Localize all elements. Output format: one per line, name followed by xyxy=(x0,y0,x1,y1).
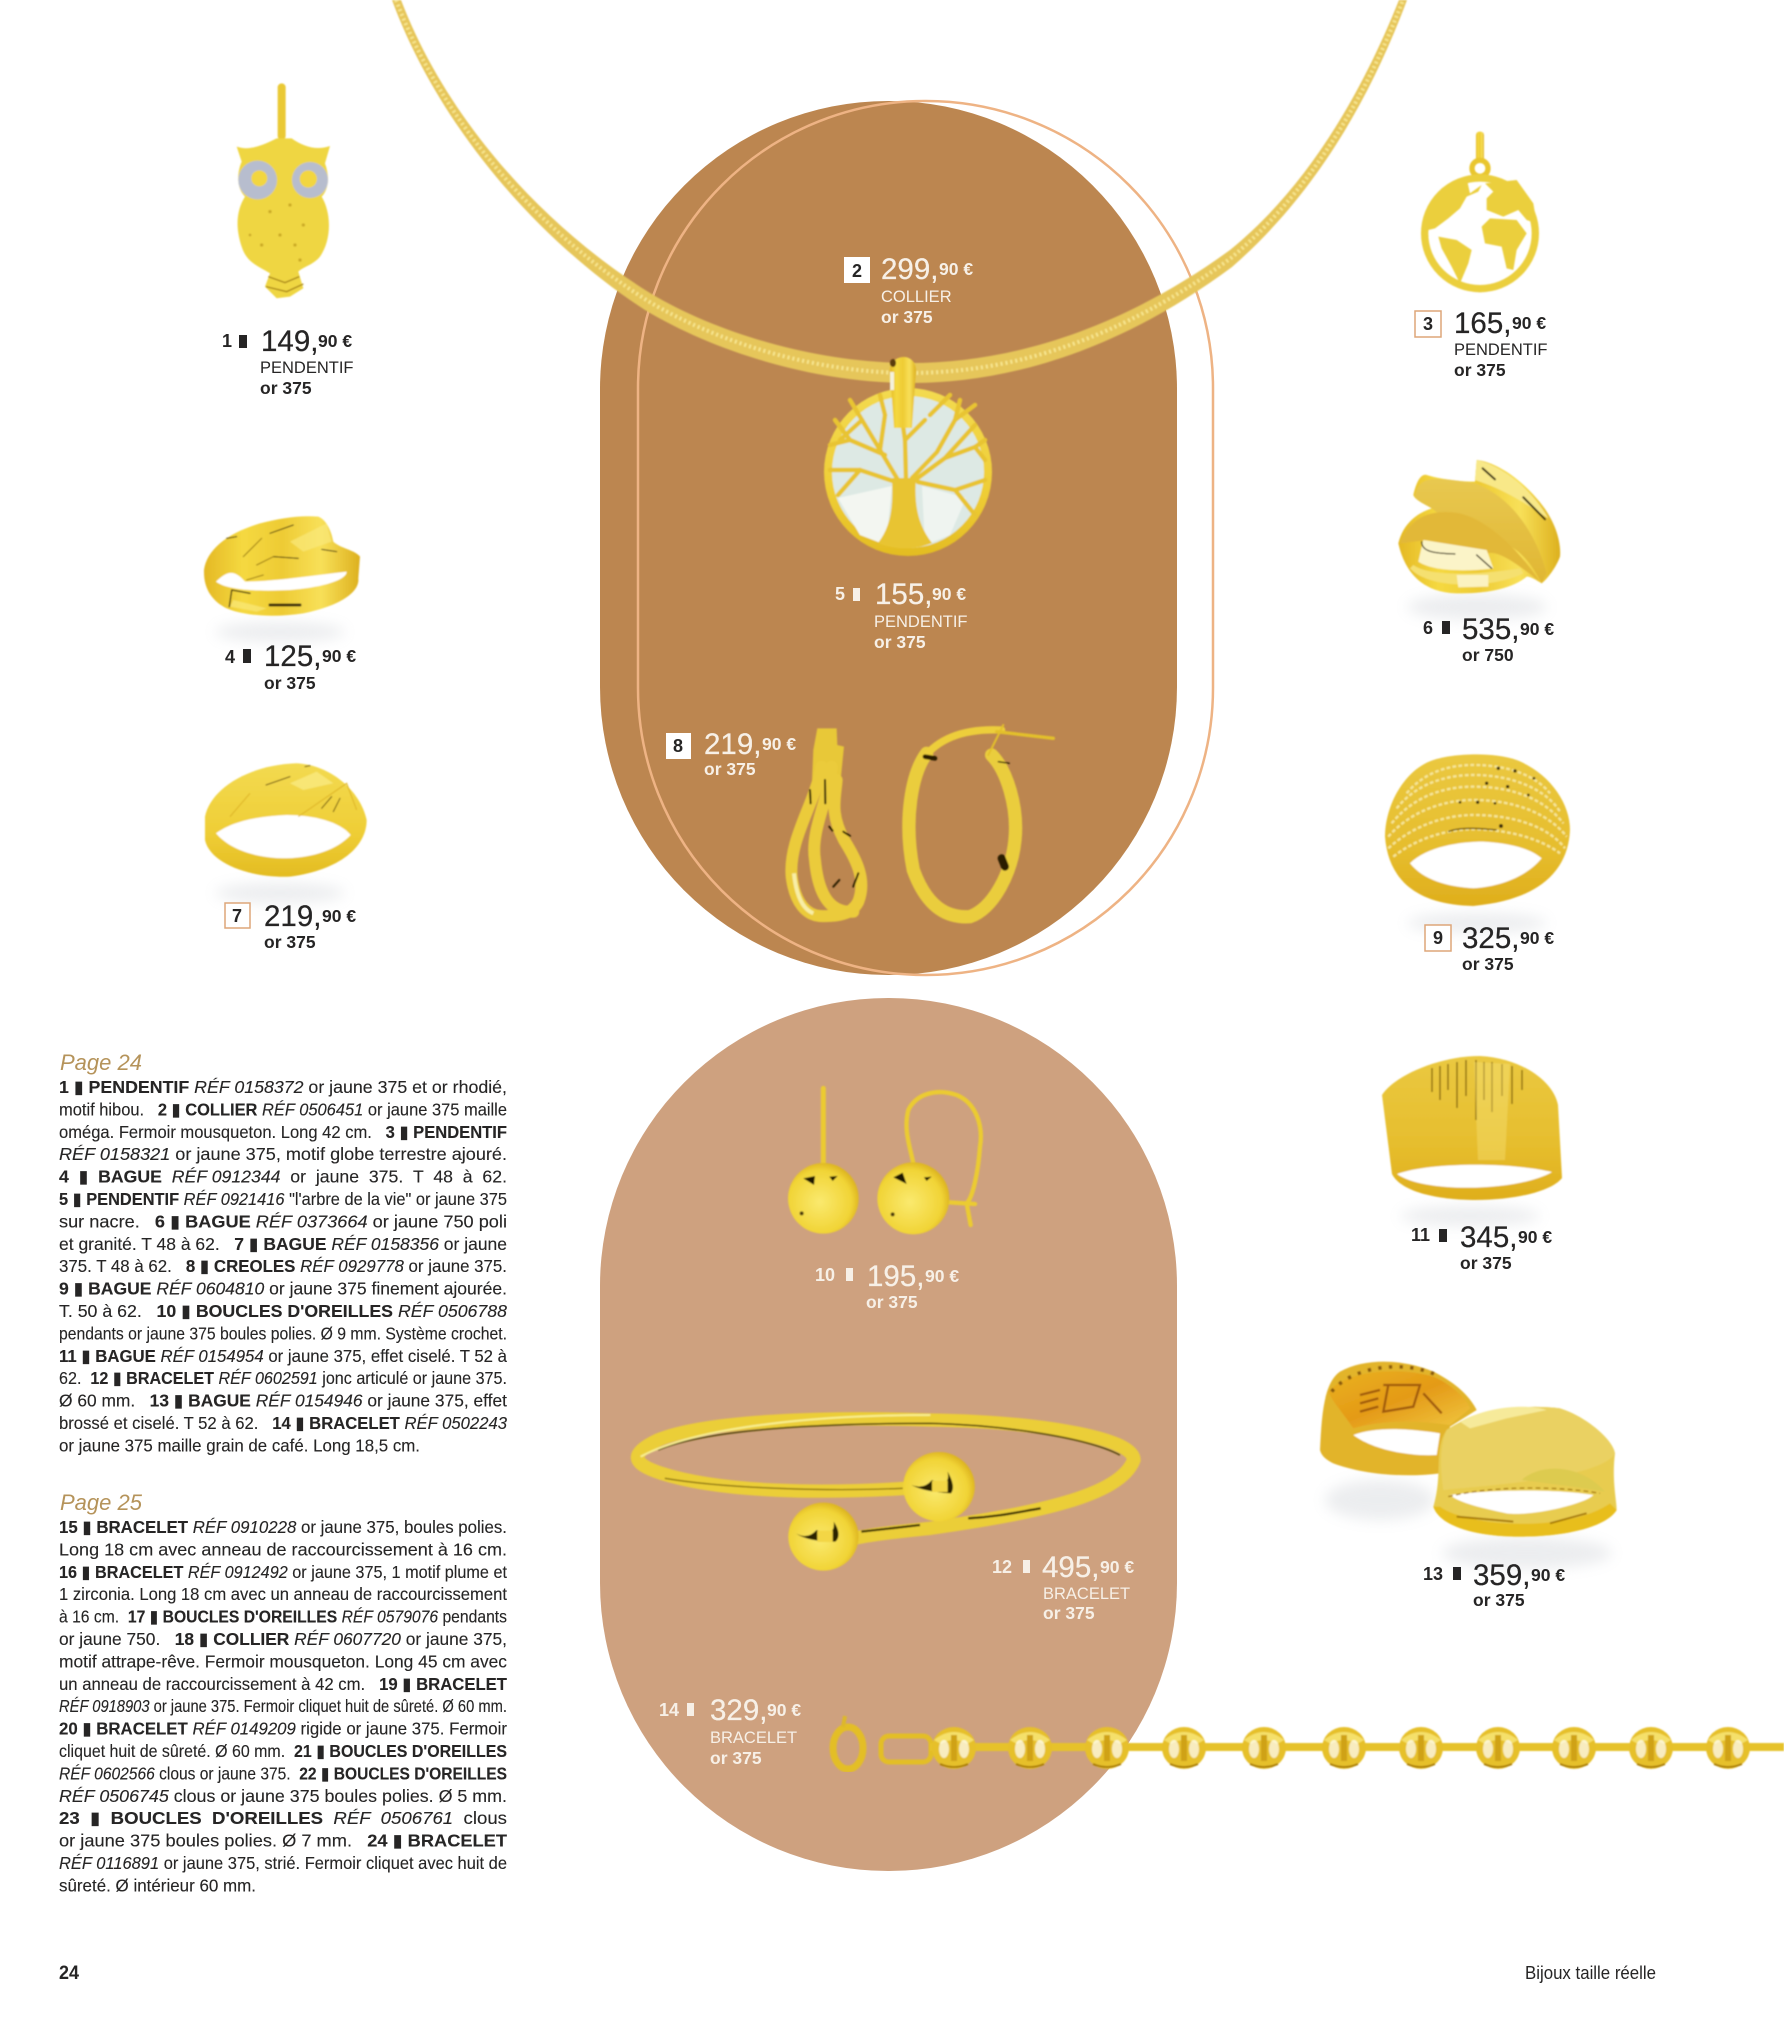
text block: page 25 descriptions: or jaune 750. 18 ▮ COLLIER RÉF 0607720 or jaune 375, xyxy=(59,1629,507,1649)
bracelet 14: chain xyxy=(833,1716,1784,1769)
price label 13 xyxy=(1423,1559,1565,1610)
price label 6: 6 xyxy=(1423,618,1433,638)
footer note: Bijoux taille réelle xyxy=(1525,1963,1656,1983)
pendant: tree of life xyxy=(824,357,992,556)
text block: page 25 descriptions: 1 zirconia. Long 18 cm avec un anneau de raccourcissement xyxy=(59,1584,507,1604)
price label 12: 495, xyxy=(1042,1551,1099,1584)
price label 1: 1 xyxy=(222,331,232,351)
price label 10: or 375 xyxy=(866,1292,918,1312)
price label 9: 9 xyxy=(1433,928,1443,948)
price label 9: or 375 xyxy=(1462,954,1514,974)
text block: page 24 descriptions: RÉF 0158321 or jaune 375, motif globe terrestre ajouré. xyxy=(59,1144,507,1164)
price label 7: 7 xyxy=(232,906,242,926)
price label 4: or 375 xyxy=(264,673,316,693)
text block: page 25 descriptions: Long 18 cm avec anneau de raccourcissement à 16 cm. xyxy=(59,1539,507,1559)
text block: page 25 descriptions: 23 ▮ BOUCLES D'OREILLES RÉF 0506761 clous xyxy=(59,1808,507,1828)
price label 7: 219, xyxy=(264,900,321,933)
ring 7 xyxy=(205,763,367,877)
text block: page 24 descriptions: motif hibou. 2 ▮ COLLIER RÉF 0506451 or jaune 375 maille xyxy=(59,1099,507,1119)
price label 2: 90 € xyxy=(939,259,973,279)
right creole xyxy=(909,725,1053,917)
price label 4: 90 € xyxy=(322,646,356,666)
text block: page 25 descriptions: motif attrape-rêve. Fermoir mousqueton. Long 45 cm avec xyxy=(59,1651,507,1671)
price label 6: or 750 xyxy=(1462,645,1514,665)
text block: page 25 descriptions: 16 ▮ BRACELET RÉF 0912492 or jaune 375, 1 motif plume et xyxy=(59,1562,507,1582)
price label 10: 195, xyxy=(867,1260,924,1293)
pendant: globe xyxy=(1425,132,1537,289)
price label 11: 90 € xyxy=(1518,1227,1552,1247)
price label 1: 149, xyxy=(261,325,318,358)
text block: page 24 descriptions: brossé et ciselé. T 52 à 62. 14 ▮ BRACELET RÉF 0502243 xyxy=(59,1413,507,1433)
price label 2: 299, xyxy=(881,253,938,286)
text block: page 24 descriptions: 1 ▮ PENDENTIF RÉF 0158372 or jaune 375 et or rhodié, xyxy=(59,1077,507,1097)
icon: bail xyxy=(890,357,916,428)
price label 12: 12 xyxy=(992,1557,1012,1577)
panel: upper capsule outline xyxy=(638,101,1213,975)
pendant: owl xyxy=(237,83,330,298)
price label 2 xyxy=(844,253,973,327)
price label 13: or 375 xyxy=(1473,1590,1525,1610)
text block: page 25 descriptions: RÉF 0116891 or jaune 375, strié. Fermoir cliquet avec huit de xyxy=(59,1853,507,1873)
text block: page 24 descriptions: 62. 12 ▮ BRACELET RÉF 0602591 jonc articulé or jaune 375. xyxy=(59,1368,507,1388)
price label 7: 90 € xyxy=(322,906,356,926)
text block: page 24 descriptions: 9 ▮ BAGUE RÉF 0604810 or jaune 375 finement ajourée. xyxy=(59,1279,507,1299)
ring 11 xyxy=(1382,1056,1562,1200)
price label 6 xyxy=(1423,613,1554,665)
text block: page 24 descriptions: 11 ▮ BAGUE RÉF 0154954 or jaune 375, effet ciselé. T 52 à xyxy=(59,1346,507,1366)
text block: page 24 descriptions: et granité. T 48 à 62. 7 ▮ BAGUE RÉF 0158356 or jaune xyxy=(59,1234,507,1254)
heading: Page 25: Page 25 xyxy=(60,1490,143,1515)
price label 3: or 375 xyxy=(1454,360,1506,380)
price label 3: 90 € xyxy=(1512,313,1546,333)
price label 12: or 375 xyxy=(1043,1603,1095,1623)
price label 1: or 375 xyxy=(260,378,312,398)
back ring xyxy=(1320,1362,1477,1475)
clasp xyxy=(833,1716,931,1769)
text block: page 24 descriptions: 375. T 48 à 62. 8 ▮ CREOLES RÉF 0929778 or jaune 375. xyxy=(59,1256,507,1276)
text block: page 25 descriptions: RÉF 0602566 clous or jaune 375. 22 ▮ BOUCLES D'OREILLES xyxy=(59,1763,507,1783)
price label 8: 90 € xyxy=(762,734,796,754)
price label 4 xyxy=(225,640,356,693)
price label 8 xyxy=(666,728,796,779)
page number: 24 xyxy=(59,1963,79,1984)
price label 5: PENDENTIF xyxy=(874,613,968,631)
text block: page 25 descriptions: RÉF 0506745 clous or jaune 375 boules polies. Ø 5 mm. xyxy=(59,1786,507,1806)
price label 9 xyxy=(1425,922,1554,974)
panel: upper capsule background xyxy=(600,101,1177,975)
price label 3 xyxy=(1415,307,1548,380)
price label 8: 219, xyxy=(704,728,761,761)
price label 1: 90 € xyxy=(318,331,352,351)
text block: page 25 descriptions: RÉF 0918903 or jaune 375. Fermoir cliquet huit de sûreté. Ø 60 mm. xyxy=(59,1696,507,1716)
price label 7: or 375 xyxy=(264,932,316,952)
text block: page 24 descriptions: sur nacre. 6 ▮ BAGUE RÉF 0373664 or jaune 750 poli xyxy=(59,1211,507,1231)
earrings 10: boules xyxy=(788,1088,981,1234)
price label 14: 329, xyxy=(710,1694,767,1727)
reflections under rings xyxy=(215,594,1612,1569)
text block: page 25 descriptions xyxy=(59,1517,507,1895)
price label 9: 90 € xyxy=(1520,928,1554,948)
price label 14: or 375 xyxy=(710,1748,762,1768)
price label 5 xyxy=(835,578,968,652)
price label 1: PENDENTIF xyxy=(260,359,354,377)
price label 12: 90 € xyxy=(1100,1557,1134,1577)
price label 11: 11 xyxy=(1411,1225,1430,1245)
ball bottom xyxy=(788,1503,859,1571)
price label 14: 14 xyxy=(659,1700,679,1720)
text block: page 24 descriptions: 5 ▮ PENDENTIF RÉF 0921416 "l'arbre de la vie" or jaune 375 xyxy=(59,1189,507,1209)
price label 5: or 375 xyxy=(874,632,926,652)
price label 2: 2 xyxy=(852,261,862,281)
price label 9: 325, xyxy=(1462,922,1519,955)
price label 10 xyxy=(815,1260,959,1312)
price label 5: 90 € xyxy=(932,584,966,604)
price label 11: 345, xyxy=(1460,1221,1517,1254)
text block: page 24 descriptions: 4 ▮ BAGUE RÉF 0912344 or jaune 375. T 48 à 62. xyxy=(59,1167,507,1187)
price label 14 xyxy=(659,1694,801,1768)
price label 3: 3 xyxy=(1423,314,1433,334)
text block: page 24 descriptions: oméga. Fermoir mousqueton. Long 42 cm. 3 ▮ PENDENTIF xyxy=(59,1122,507,1142)
price label 7 xyxy=(225,900,356,952)
ring 13 xyxy=(1320,1362,1617,1537)
price label 4: 125, xyxy=(264,640,321,673)
price label 8: 8 xyxy=(673,736,683,756)
heading: Page 24: Page 24 xyxy=(60,1050,142,1075)
text block: page 24 descriptions: pendants or jaune 375 boules polies. Ø 9 mm. Système crochet. xyxy=(59,1323,507,1343)
text block: page 25 descriptions: cliquet huit de sûreté. Ø 60 mm. 21 ▮ BOUCLES D'OREILLES xyxy=(59,1741,507,1761)
text block: page 24 descriptions: or jaune 375 maille grain de café. Long 18,5 cm. xyxy=(59,1435,420,1455)
left creole xyxy=(791,728,861,916)
price label 14: BRACELET xyxy=(710,1729,797,1747)
price label 5: 155, xyxy=(875,578,932,611)
text block: page 25 descriptions: à 16 cm. 17 ▮ BOUCLES D'OREILLES RÉF 0579076 pendants xyxy=(59,1607,507,1627)
price label 10: 90 € xyxy=(925,1266,959,1286)
ball top xyxy=(903,1452,975,1521)
bracelet 12: jonc xyxy=(638,1415,1134,1571)
connector bars xyxy=(930,1743,1784,1751)
price label 13: 13 xyxy=(1423,1564,1443,1584)
price label 8: or 375 xyxy=(704,759,756,779)
text block: page 24 descriptions: Ø 60 mm. 13 ▮ BAGUE RÉF 0154946 or jaune 375, effet xyxy=(59,1391,507,1411)
text block: page 24 descriptions xyxy=(59,1077,507,1455)
price label 12 xyxy=(992,1551,1134,1623)
price label 14: 90 € xyxy=(767,1700,801,1720)
price label 6: 90 € xyxy=(1520,619,1554,639)
price label 5: 5 xyxy=(835,584,845,604)
price label 11 xyxy=(1411,1221,1552,1273)
text block: page 24 descriptions: T. 50 à 62. 10 ▮ BOUCLES D'OREILLES RÉF 0506788 xyxy=(59,1301,507,1321)
left ball earring xyxy=(788,1088,859,1234)
ring 4 xyxy=(204,516,360,616)
price label 1 xyxy=(222,325,354,398)
price label 4: 4 xyxy=(225,647,235,667)
price label 6: 535, xyxy=(1462,613,1519,646)
ring 6 xyxy=(1398,460,1560,593)
price label 11: or 375 xyxy=(1460,1253,1512,1273)
panel: lower capsule background xyxy=(600,998,1177,1871)
price label 13: 90 € xyxy=(1531,1565,1565,1585)
price label 3: 165, xyxy=(1454,307,1511,340)
earrings 8: creoles xyxy=(791,725,1053,917)
ring 9 xyxy=(1385,754,1570,906)
text block: page 25 descriptions: un anneau de raccourcissement à 42 cm. 19 ▮ BRACELET xyxy=(59,1674,507,1694)
text block: page 25 descriptions: 15 ▮ BRACELET RÉF 0910228 or jaune 375, boules polies. xyxy=(59,1517,507,1537)
price label 2: COLLIER xyxy=(881,288,952,306)
price label 2: or 375 xyxy=(881,307,933,327)
price label 12: BRACELET xyxy=(1043,1585,1130,1603)
right ball earring xyxy=(877,1092,981,1234)
necklace: omega collier xyxy=(392,0,1407,383)
text block: page 25 descriptions: or jaune 375 boules polies. Ø 7 mm. 24 ▮ BRACELET xyxy=(59,1831,507,1851)
price label 3: PENDENTIF xyxy=(1454,341,1548,359)
price label 10: 10 xyxy=(815,1265,835,1285)
text block: page 25 descriptions: 20 ▮ BRACELET RÉF 0149209 rigide or jaune 375. Fermoir xyxy=(59,1719,507,1739)
price label 13: 359, xyxy=(1473,1559,1530,1592)
front ring xyxy=(1433,1407,1617,1537)
text block: page 25 descriptions: sûreté. Ø intérieur 60 mm. xyxy=(59,1875,256,1895)
